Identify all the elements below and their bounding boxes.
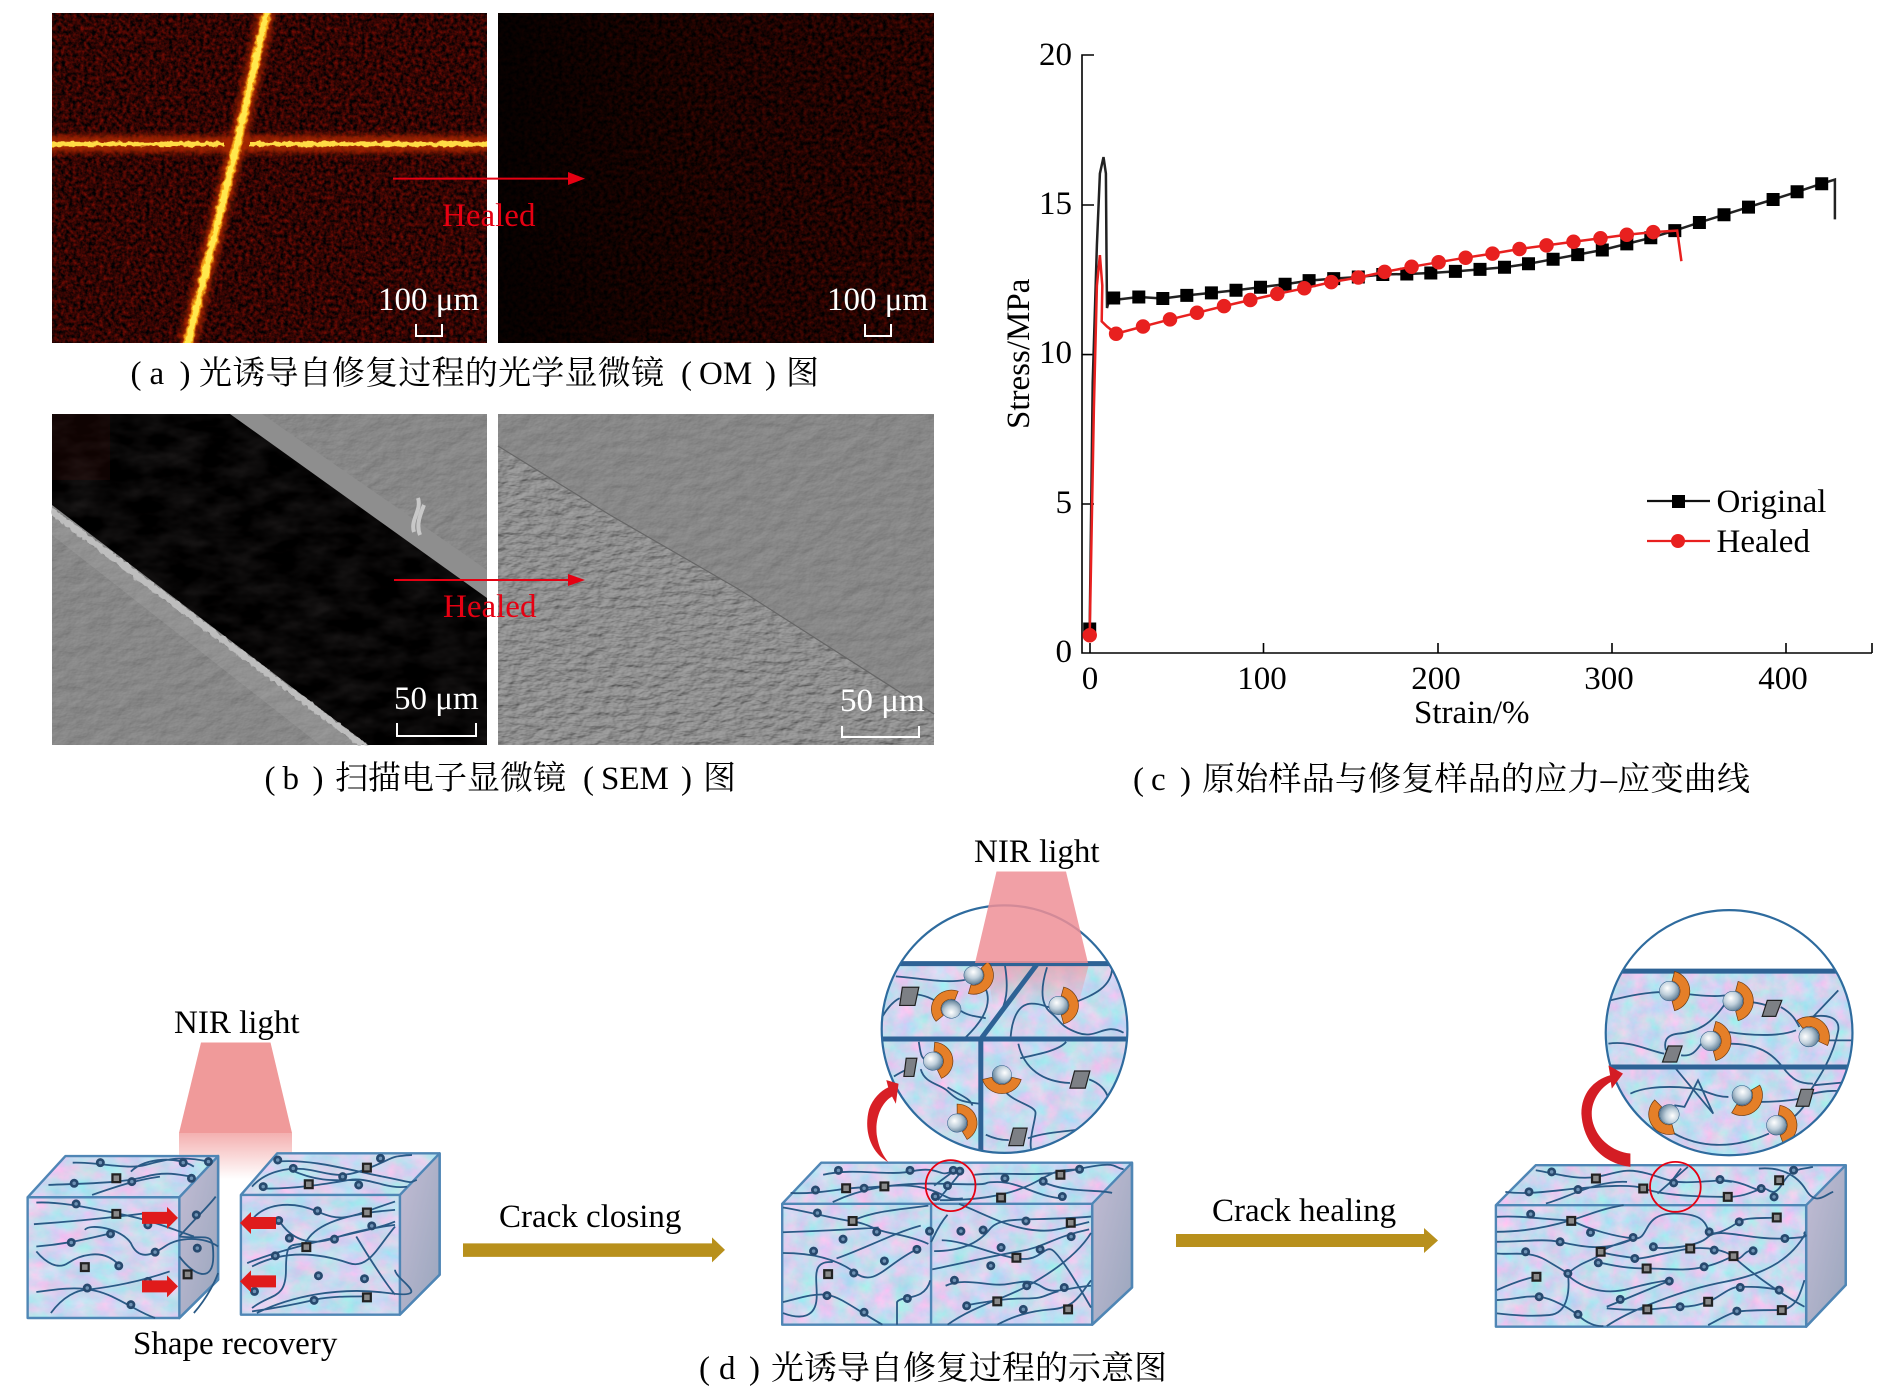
block and circle: right healed [1496, 910, 1860, 1327]
light beam: left NIR [179, 1042, 292, 1179]
highlight circle: middle [926, 1160, 975, 1211]
scale bar: 50 um right: 50 μm [840, 683, 925, 719]
caption a: ( [681, 356, 692, 392]
series: Healed [1090, 231, 1681, 635]
caption a: ( [130, 356, 142, 392]
arrow: crack healing [1176, 1228, 1438, 1253]
x axis tick labels: 0 [1082, 661, 1098, 697]
panel: (a) optical microscope images [46, 10, 934, 346]
x axis tick labels: 100 [1237, 661, 1287, 697]
image: SEM cracked sample [52, 414, 487, 745]
x axis tick labels: 200 [1411, 661, 1461, 697]
caption d: ) [749, 1351, 760, 1387]
scale bar: 50 um left: 50 μm [394, 681, 479, 717]
block: right half cube [241, 1153, 440, 1315]
scale bar: 100 um right: 100 μm [827, 282, 928, 318]
label: Healed b: Healed [443, 589, 537, 625]
caption c: ( [1133, 762, 1144, 798]
block: right cube [1496, 1165, 1846, 1327]
label: Crack healing: Crack healing [1212, 1193, 1396, 1229]
caption a: ) [765, 356, 776, 392]
caption a: 光诱导自修复过程的光学显微镜 [199, 355, 664, 392]
caption a: OM [699, 356, 752, 392]
chart: stress-strain curve [1001, 37, 1872, 731]
arrow: red zoom arrow middle [867, 1080, 899, 1162]
y axis tick labels: 0 [1056, 634, 1072, 670]
y axis tick labels: 5 [1056, 485, 1072, 521]
scale bar: 100 um left: 100 μm [378, 282, 479, 318]
magnified circle: middle [875, 905, 1135, 1160]
legend: Original [1716, 484, 1826, 520]
caption d: ( [699, 1351, 710, 1387]
x axis tick labels [1082, 661, 1808, 697]
caption b: 图 [703, 761, 736, 797]
image: OM healed sample [498, 13, 934, 343]
y axis tick labels: 15 [1039, 186, 1072, 222]
scale bar: 50 um right [840, 683, 925, 737]
light beam: middle NIR [975, 872, 1088, 963]
image: OM cracked sample [46, 10, 493, 346]
arrow: healed arrow a [393, 172, 585, 185]
caption b: ) [681, 761, 692, 797]
caption c: ) [1180, 762, 1191, 798]
magnified circle: right [1597, 910, 1860, 1161]
y axis tick labels: 20 [1039, 37, 1072, 73]
caption d: 光诱导自修复过程的示意图 [771, 1350, 1167, 1387]
y axis title: Stress/MPa [1001, 278, 1037, 429]
caption b: ) [312, 761, 324, 797]
arrows: red closing arrows [142, 1207, 276, 1297]
scale bar: 50 um left [394, 681, 479, 736]
caption b: b [282, 761, 299, 797]
series: Original [1090, 157, 1835, 629]
caption b: ( [583, 761, 594, 797]
caption c: c [1151, 762, 1166, 798]
scale bar: 100 um left [378, 282, 479, 336]
legend: Healed [1716, 524, 1810, 560]
x axis tick labels: 300 [1584, 661, 1634, 697]
label: NIR light left: NIR light [174, 1005, 300, 1041]
panel: (b) SEM images [52, 414, 934, 745]
caption b: SEM [601, 761, 669, 797]
y axis tick labels: 10 [1039, 335, 1072, 371]
arrow: healed arrow b [394, 574, 585, 586]
label: Shape recovery: Shape recovery [133, 1326, 338, 1362]
arrow: crack closing [463, 1237, 725, 1262]
caption d: d [719, 1351, 736, 1387]
label: NIR light middle: NIR light [974, 834, 1100, 870]
caption a: a [150, 356, 164, 392]
axes [1082, 55, 1872, 653]
scale bar: 100 um right [827, 282, 928, 336]
highlight circle: right [1650, 1162, 1701, 1212]
image: SEM healed sample [498, 414, 934, 745]
x axis tick labels: 400 [1758, 661, 1808, 697]
legend [1647, 484, 1826, 560]
arrow: red zoom arrow right [1581, 1065, 1630, 1167]
y axis tick labels [1039, 37, 1072, 670]
block: left half cube [28, 1156, 218, 1318]
label: Crack closing: Crack closing [499, 1199, 681, 1235]
caption b: 扫描电子显微镜 [335, 760, 566, 797]
panel: (d) schematic [28, 834, 1860, 1362]
label: Healed a: Healed [442, 198, 536, 234]
caption b: ( [264, 761, 276, 797]
caption a: ) [180, 356, 190, 392]
x axis title: Strain/% [1414, 695, 1529, 731]
block: middle healed crack [782, 1080, 1132, 1325]
caption c: 原始样品与修复样品的应力–应变曲线 [1202, 761, 1750, 798]
caption a: 图 [786, 356, 819, 392]
